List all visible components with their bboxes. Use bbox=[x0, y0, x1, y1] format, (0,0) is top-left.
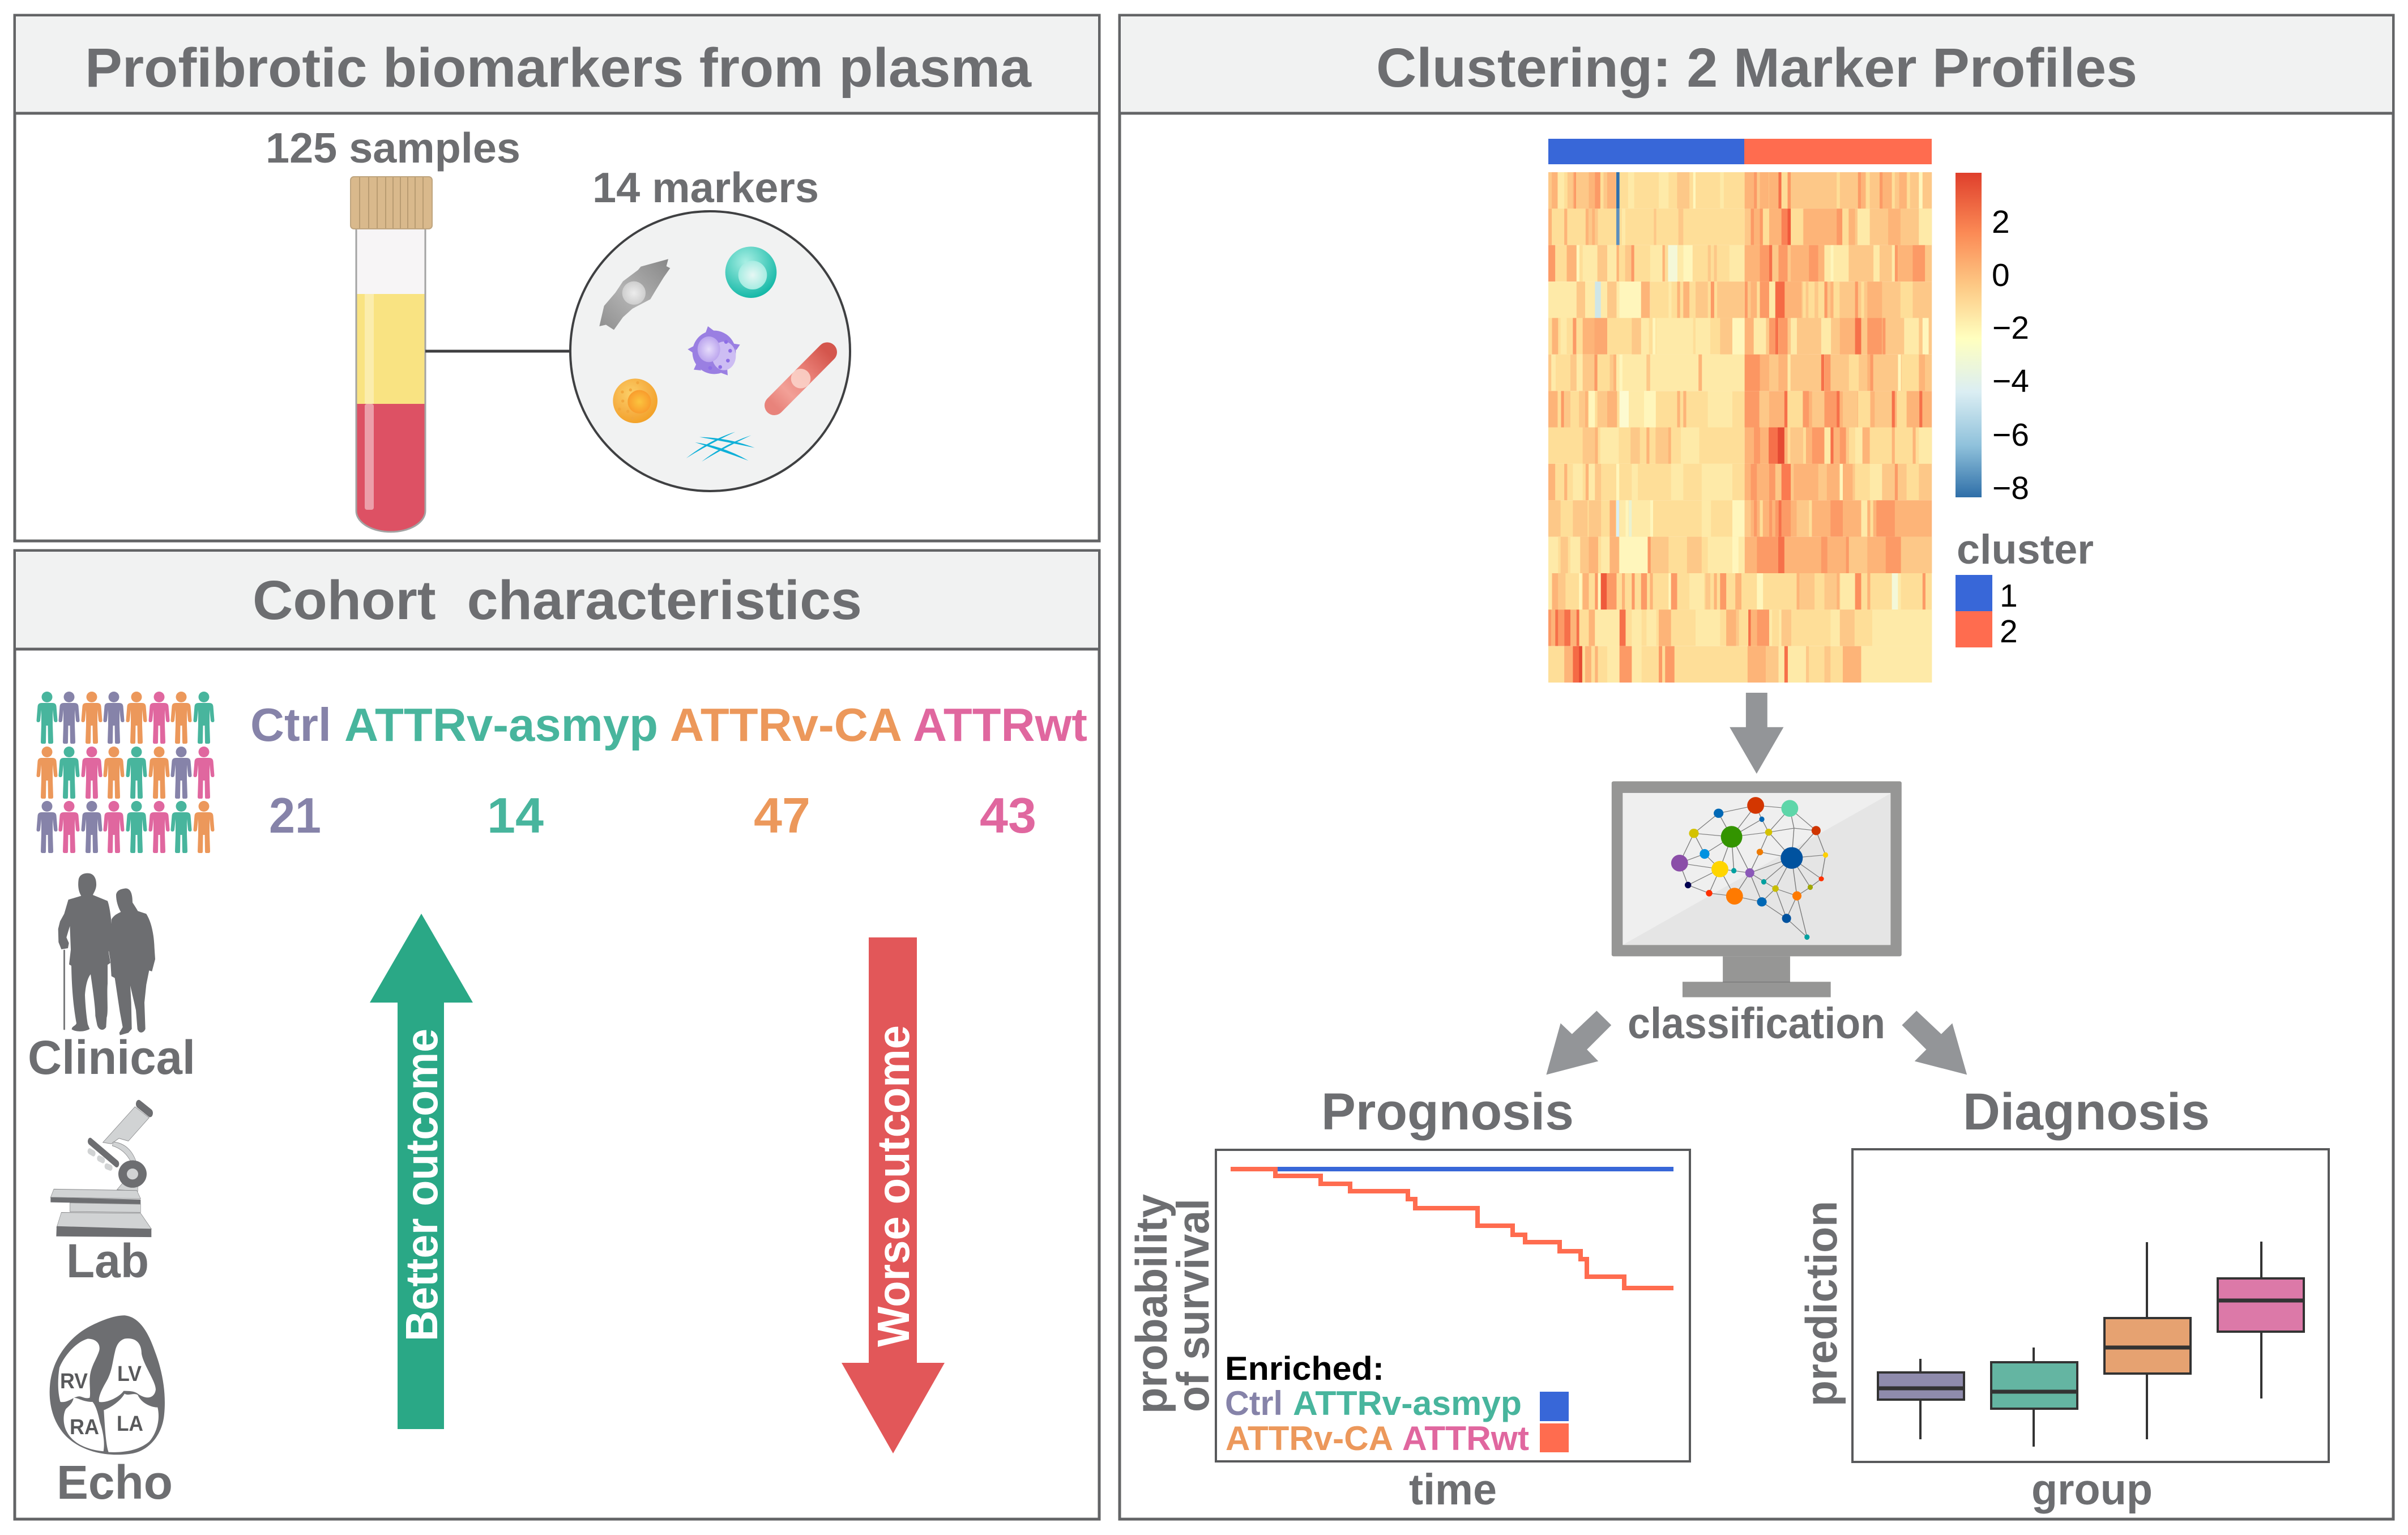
colour scale legend bbox=[1956, 173, 2029, 506]
chart: prediction boxplot bbox=[1852, 1149, 2329, 1462]
label: clinical: Clinical bbox=[28, 1031, 195, 1084]
arrow: to diagnosis bbox=[1902, 1010, 1967, 1074]
heatmap bbox=[1548, 190, 1932, 664]
colour scale legend: 0 bbox=[1992, 257, 2010, 293]
icon: orange cell bbox=[613, 378, 657, 423]
cluster legend bbox=[1956, 527, 2094, 650]
panel: clustering bbox=[1120, 15, 2393, 1519]
panel: cohort characteristics bbox=[15, 551, 1099, 1519]
legend: enriched groups bbox=[1225, 1350, 1569, 1457]
panel header: clustering bbox=[1121, 16, 2392, 113]
heading: clustering: Clustering: 2 Marker Profiles bbox=[1376, 37, 2137, 99]
panel: profibrotic biomarkers bbox=[15, 15, 1099, 541]
label: classification: classification bbox=[1628, 999, 1885, 1048]
group labels: ATTRv-asmyp bbox=[344, 698, 658, 751]
icon: echo heart: LA bbox=[117, 1412, 143, 1436]
icon: echo heart: LV bbox=[117, 1362, 142, 1386]
colour scale legend: −2 bbox=[1992, 310, 2029, 346]
icon: patient pictograms bbox=[36, 692, 214, 853]
axis label: time: time bbox=[1409, 1465, 1497, 1514]
icon: blue fibers bbox=[686, 432, 755, 462]
axis label: probability of survival: of survival bbox=[1168, 1199, 1218, 1412]
group counts: 43 bbox=[980, 787, 1036, 843]
line: cluster 1 survival bbox=[1275, 1167, 1673, 1171]
circle: marker cells bbox=[570, 211, 850, 491]
group labels: ATTRwt bbox=[913, 698, 1087, 751]
box: ATTRv-asmyp bbox=[1991, 1348, 2077, 1447]
icon: blood sample tube bbox=[351, 177, 432, 532]
label: 125 samples: 125 samples bbox=[266, 124, 520, 172]
box: Ctrl bbox=[1878, 1359, 1964, 1439]
panel header: cohort characteristics bbox=[16, 552, 1098, 649]
connector line bbox=[425, 350, 570, 352]
arrow: better outcome bbox=[370, 914, 473, 1429]
line: cluster 2 survival bbox=[1231, 1169, 1673, 1288]
arrow: to prognosis bbox=[1546, 1010, 1611, 1074]
label: 14 markers: 14 markers bbox=[592, 164, 819, 211]
colour scale legend: −8 bbox=[1992, 470, 2029, 506]
legend: enriched groups: ATTRv-asmyp bbox=[1293, 1384, 1522, 1422]
arrow: worse outcome bbox=[842, 937, 945, 1453]
cluster annotation bar bbox=[1548, 139, 1932, 164]
icon: monitor with neural network bbox=[1612, 781, 1902, 997]
legend: enriched groups: Enriched: bbox=[1225, 1350, 1384, 1387]
axis label: group: group bbox=[2031, 1465, 2153, 1514]
box: ATTRwt bbox=[2218, 1242, 2304, 1398]
axis label: probability of survival bbox=[1126, 1194, 1218, 1414]
icon: purple cell bbox=[688, 326, 740, 376]
cluster legend: 1 bbox=[2000, 578, 2018, 614]
icon: echo heart: RV bbox=[60, 1370, 88, 1393]
panel header: profibrotic biomarkers bbox=[16, 16, 1098, 113]
colour scale legend: −4 bbox=[1992, 363, 2029, 399]
label: lab: Lab bbox=[66, 1234, 149, 1287]
cluster legend: 2 bbox=[2000, 613, 2018, 650]
legend: enriched groups: Ctrl bbox=[1225, 1384, 1283, 1422]
colour scale legend: 2 bbox=[1992, 204, 2010, 240]
icon: microscope bbox=[50, 1104, 151, 1237]
icon: grey fibroblast bbox=[599, 259, 670, 330]
heading: diagnosis: Diagnosis bbox=[1963, 1083, 2210, 1141]
legend: enriched groups: ATTRwt bbox=[1402, 1419, 1529, 1457]
cluster legend: cluster bbox=[1957, 527, 2094, 573]
group counts: 21 bbox=[269, 787, 321, 843]
arrow: worse outcome: Worse outcome bbox=[868, 1025, 919, 1347]
group labels bbox=[250, 698, 1087, 751]
group labels: Ctrl bbox=[250, 698, 331, 751]
arrow: heatmap to classifier bbox=[1730, 693, 1783, 774]
icon: echo heart: RA bbox=[70, 1415, 99, 1439]
icon: red pill cell bbox=[774, 352, 827, 406]
group labels: ATTRv-CA bbox=[670, 698, 902, 751]
group counts: 47 bbox=[754, 787, 810, 843]
heading: profibrotic biomarkers: Profibrotic biomarkers from plasma bbox=[85, 37, 1032, 99]
box: ATTRv-CA bbox=[2104, 1242, 2191, 1439]
icon: teal cell bbox=[725, 246, 776, 298]
icon: elderly couple silhouette bbox=[58, 873, 155, 1035]
legend: enriched groups: ATTRv-CA bbox=[1226, 1419, 1393, 1457]
chart: survival curve bbox=[1216, 1150, 1690, 1461]
axis label: probability of survival: probability bbox=[1126, 1194, 1176, 1414]
heading: cohort characteristics: Cohort characteristics bbox=[253, 569, 862, 631]
group counts: 14 bbox=[487, 787, 544, 843]
heading: prognosis: Prognosis bbox=[1321, 1083, 1574, 1141]
group counts bbox=[269, 787, 1036, 843]
arrow: better outcome: Better outcome bbox=[396, 1029, 447, 1341]
label: echo: Echo bbox=[57, 1456, 173, 1509]
icon: echo heart bbox=[50, 1315, 165, 1455]
colour scale legend: −6 bbox=[1992, 417, 2029, 453]
axis label: prediction: prediction bbox=[1796, 1201, 1846, 1406]
